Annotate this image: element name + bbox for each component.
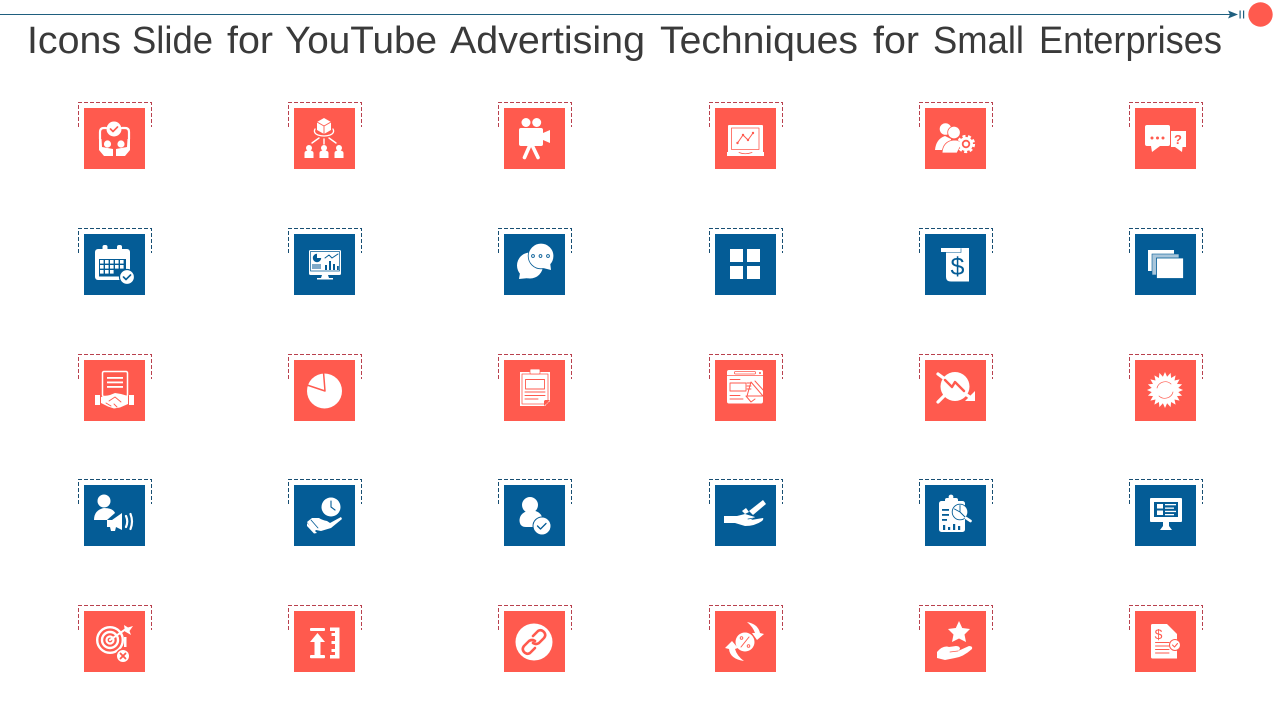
icon tile: sun gear [1130, 354, 1202, 421]
icon tile: team approval [78, 102, 152, 169]
header line with arrow [0, 10, 1244, 18]
header circle [1248, 2, 1273, 27]
icon tile: text height [288, 606, 362, 672]
icon tile: clipboard document [498, 354, 572, 421]
title: for [873, 20, 919, 62]
icon tile: contract handshake [78, 354, 152, 421]
title: Techniques [660, 20, 858, 62]
title: YouTube [285, 20, 437, 62]
icon tile: percentage cycle [710, 606, 782, 672]
title: Enterprises [1039, 20, 1222, 62]
icon tile: stacked windows [1130, 228, 1202, 295]
icon tile: laptop chart [710, 102, 782, 169]
icon tile: chat question: ? [1174, 132, 1182, 147]
icon tile: dashboard monitor [288, 228, 362, 295]
title: Icons [27, 20, 121, 62]
icon tile: hand with pen [710, 480, 782, 546]
icon tile: chat question [1130, 102, 1202, 169]
icon tile: monitor layout [1130, 480, 1202, 546]
icon tile: verified user [498, 480, 572, 546]
icon tile: video camera [498, 102, 572, 169]
icon tile: chat bubbles [498, 228, 572, 295]
icon tile: person megaphone [78, 480, 152, 546]
icon tile: four squares grid [710, 228, 782, 295]
icon tile: dollar receipt: $ [951, 253, 965, 281]
icon tile: missed target [78, 606, 152, 672]
icon tile: chain link [498, 606, 572, 672]
icon tile: declining chart globe [920, 354, 992, 421]
title: for [227, 20, 273, 62]
icon tile: clipboard analytics [920, 480, 992, 546]
icon tile: product network [288, 102, 362, 169]
icon tile: invoice approved [1130, 606, 1202, 672]
icon tile: dollar receipt [920, 228, 992, 295]
icon tile: pie chart [288, 354, 362, 421]
title: Small [933, 20, 1024, 62]
icon tile: invoice approved: $ [1155, 626, 1163, 642]
title: Advertising [450, 20, 645, 62]
icon tile: hand holding clock [288, 480, 362, 546]
title: Slide [132, 20, 213, 62]
icon tile: calendar check [78, 228, 152, 295]
icon tile: browser megaphone [710, 354, 782, 421]
icon tile: users settings [920, 102, 992, 169]
icon tile: star in hand [920, 606, 992, 672]
icon grid [78, 102, 1202, 672]
